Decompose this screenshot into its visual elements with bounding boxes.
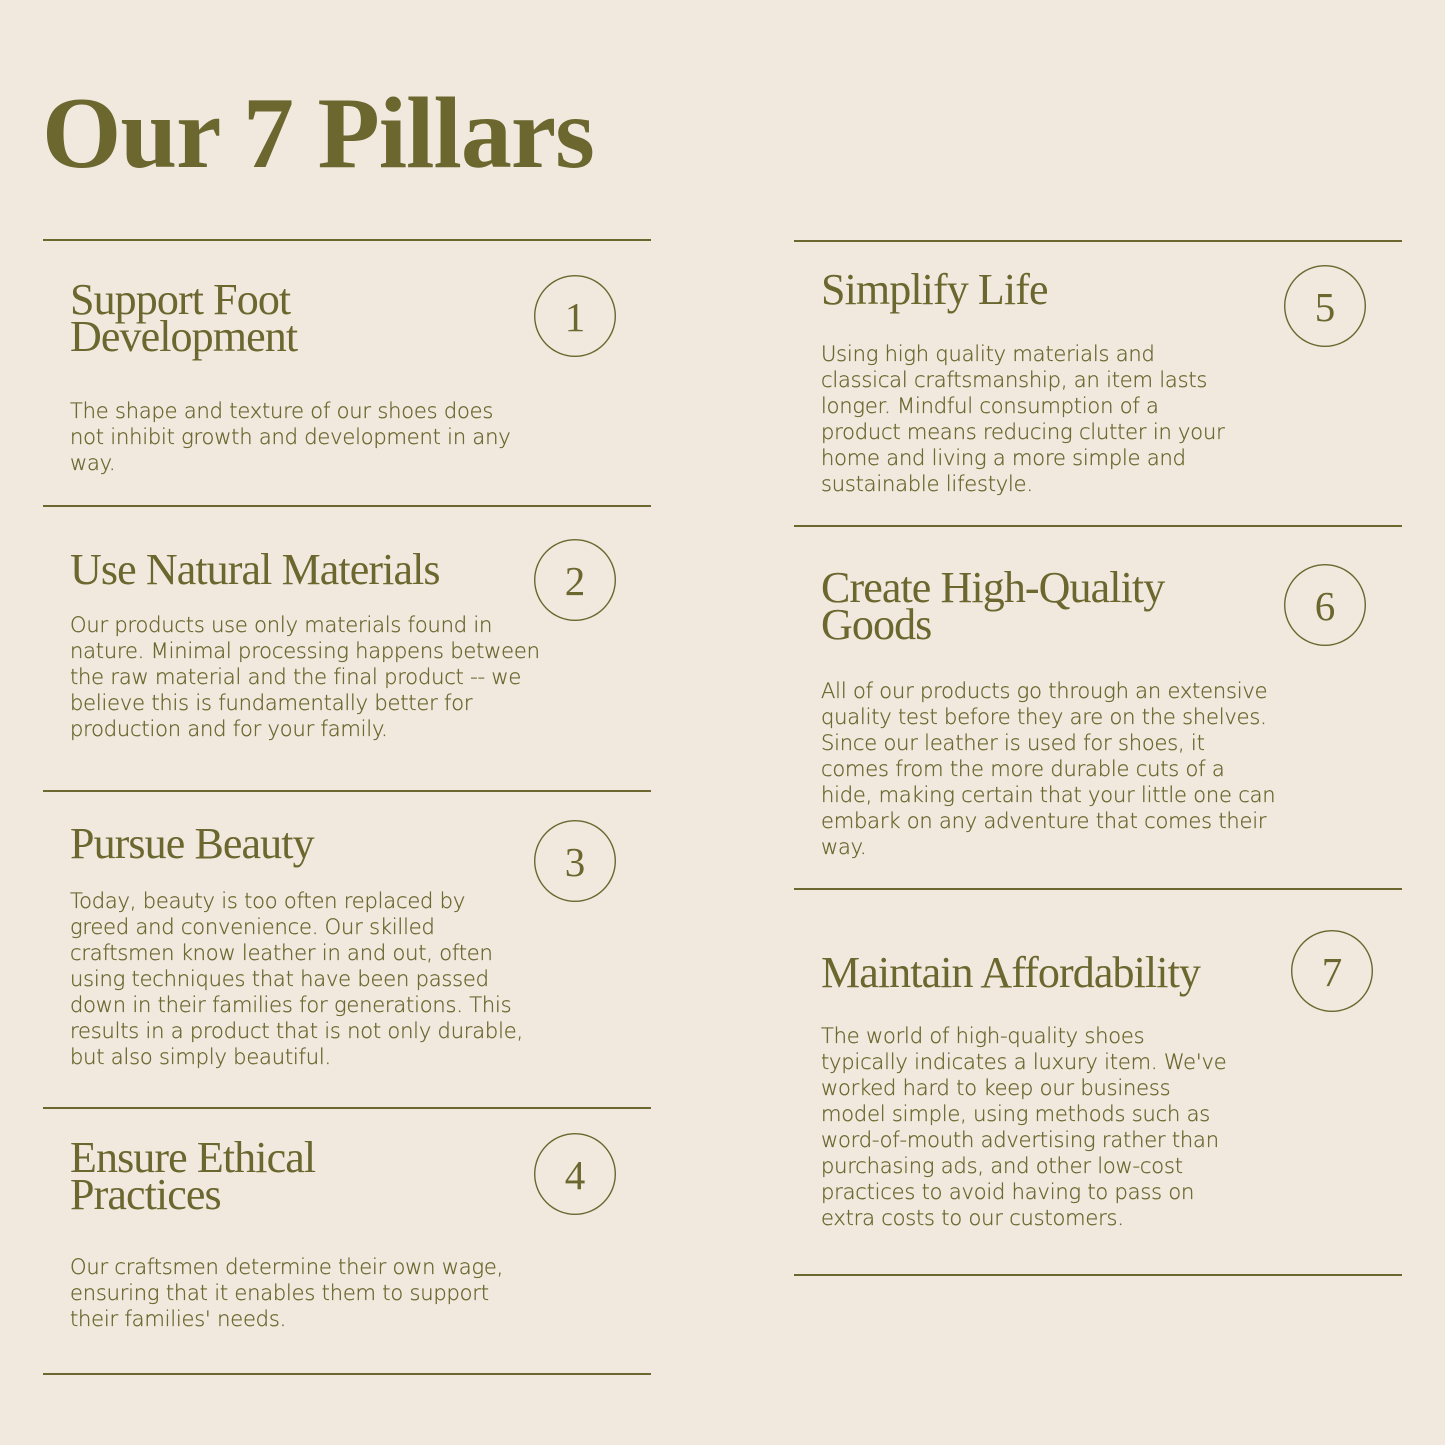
heading: pillar 6 — [821, 563, 1166, 649]
panel: pillar 3 — [70, 819, 616, 1069]
title: Our 7 Pillars — [42, 77, 594, 190]
body text: pillar 6 — [821, 679, 1275, 859]
panel: pillar 7 — [821, 930, 1373, 1230]
body text: pillar 3: craftsmen know leather in and out, often — [70, 941, 493, 965]
body text: pillar 6: All of our products go through an extensive — [821, 679, 1267, 703]
body text: pillar 7: practices to avoid having to pass on — [821, 1180, 1194, 1204]
body text: pillar 6: Since our leather is used for shoes, it — [821, 731, 1205, 755]
body text: pillar 7 — [821, 1024, 1226, 1230]
heading: pillar 4 — [70, 1133, 316, 1219]
number circle 7 — [1291, 930, 1373, 1012]
body text: pillar 5 — [821, 342, 1225, 496]
body text: pillar 1: The shape and texture of our shoes does — [70, 399, 493, 423]
heading: pillar 6: Goods — [821, 600, 931, 649]
body text: pillar 7: extra costs to our customers. — [821, 1206, 1124, 1230]
body text: pillar 3: down in their families for generations. This — [70, 993, 511, 1017]
number circle 3: 3 — [565, 839, 585, 885]
body text: pillar 3 — [70, 889, 523, 1069]
number circle 6: 6 — [1315, 583, 1335, 629]
body text: pillar 3: Today, beauty is too often replaced by — [70, 889, 465, 913]
body text: pillar 6: quality test before they are on the shelves. — [821, 705, 1267, 729]
body text: pillar 7: The world of high-quality shoes — [821, 1024, 1144, 1048]
heading: pillar 6: Create High-Quality — [821, 563, 1164, 612]
panel: pillar 2 — [70, 539, 616, 741]
body text: pillar 1: way. — [70, 451, 115, 475]
number circle 6 — [1284, 564, 1366, 646]
body text: pillar 5: home and living a more simple and — [821, 446, 1186, 470]
heading: pillar 4: Practices — [70, 1170, 221, 1219]
body text: pillar 4 — [70, 1255, 503, 1331]
body text: pillar 2: believe this is fundamentally better for — [70, 691, 472, 715]
number circle 1: 1 — [565, 294, 585, 340]
number circle 5 — [1284, 265, 1366, 347]
number circle 4 — [534, 1133, 616, 1215]
body text: pillar 6: embark on any adventure that comes their — [821, 809, 1266, 833]
number circle 2 — [534, 539, 616, 621]
body text: pillar 5: longer. Mindful consumption of a — [821, 394, 1159, 418]
body text: pillar 5: Using high quality materials and — [821, 342, 1155, 366]
body text: pillar 6: way. — [821, 835, 866, 859]
heading: pillar 7: Maintain Affordability — [821, 948, 1200, 997]
number circle 2: 2 — [565, 558, 585, 604]
body text: pillar 2: production and for your family. — [70, 717, 388, 741]
body text: pillar 4: Our craftsmen determine their own wage, — [70, 1255, 503, 1279]
body text: pillar 6: hide, making certain that your little one can — [821, 783, 1275, 807]
number circle 3 — [534, 820, 616, 902]
panel: pillar 5 — [821, 265, 1366, 496]
heading: pillar 3: Pursue Beauty — [70, 819, 314, 868]
body text: pillar 1 — [70, 399, 510, 475]
body text: pillar 6: comes from the more durable cuts of a — [821, 757, 1225, 781]
body text: pillar 4: ensuring that it enables them to support — [70, 1281, 489, 1305]
body text: pillar 3: results in a product that is not only durable, — [70, 1019, 523, 1043]
heading: pillar 2: Use Natural Materials — [70, 545, 440, 594]
heading: pillar 1: Support Foot — [70, 275, 290, 324]
body text: pillar 7: purchasing ads, and other low-cost — [821, 1154, 1183, 1178]
heading: pillar 1 — [70, 275, 298, 361]
number circle 5: 5 — [1315, 284, 1335, 330]
panel: pillar 6 — [821, 563, 1366, 859]
number circle 7: 7 — [1322, 949, 1342, 995]
heading: pillar 4: Ensure Ethical — [70, 1133, 315, 1182]
body text: pillar 3: but also simply beautiful. — [70, 1045, 331, 1069]
body text: pillar 7: typically indicates a luxury item. We've — [821, 1050, 1226, 1074]
body text: pillar 2: the raw material and the final product -- we — [70, 665, 521, 689]
body text: pillar 1: not inhibit growth and development in any — [70, 425, 510, 449]
heading: pillar 5: Simplify Life — [821, 265, 1048, 314]
body text: pillar 5: classical craftsmanship, an item lasts — [821, 368, 1207, 392]
body text: pillar 5: product means reducing clutter in your — [821, 420, 1225, 444]
number circle 1 — [534, 275, 616, 357]
body text: pillar 7: model simple, using methods such as — [821, 1102, 1210, 1126]
body text: pillar 3: greed and convenience. Our skilled — [70, 915, 435, 939]
body text: pillar 2: nature. Minimal processing happens between — [70, 639, 540, 663]
panel: pillar 1 — [70, 275, 616, 475]
body text: pillar 5: sustainable lifestyle. — [821, 472, 1033, 496]
body text: pillar 2 — [70, 613, 540, 741]
number circle 4: 4 — [565, 1152, 585, 1198]
body text: pillar 7: worked hard to keep our business — [821, 1076, 1170, 1100]
body text: pillar 3: using techniques that have been passed — [70, 967, 489, 991]
panel: pillar 4 — [70, 1133, 616, 1331]
heading: pillar 1: Development — [70, 312, 297, 361]
body text: pillar 7: word-of-mouth advertising rather than — [821, 1128, 1219, 1152]
body text: pillar 2: Our products use only materials found in — [70, 613, 492, 637]
body text: pillar 4: their families' needs. — [70, 1307, 286, 1331]
